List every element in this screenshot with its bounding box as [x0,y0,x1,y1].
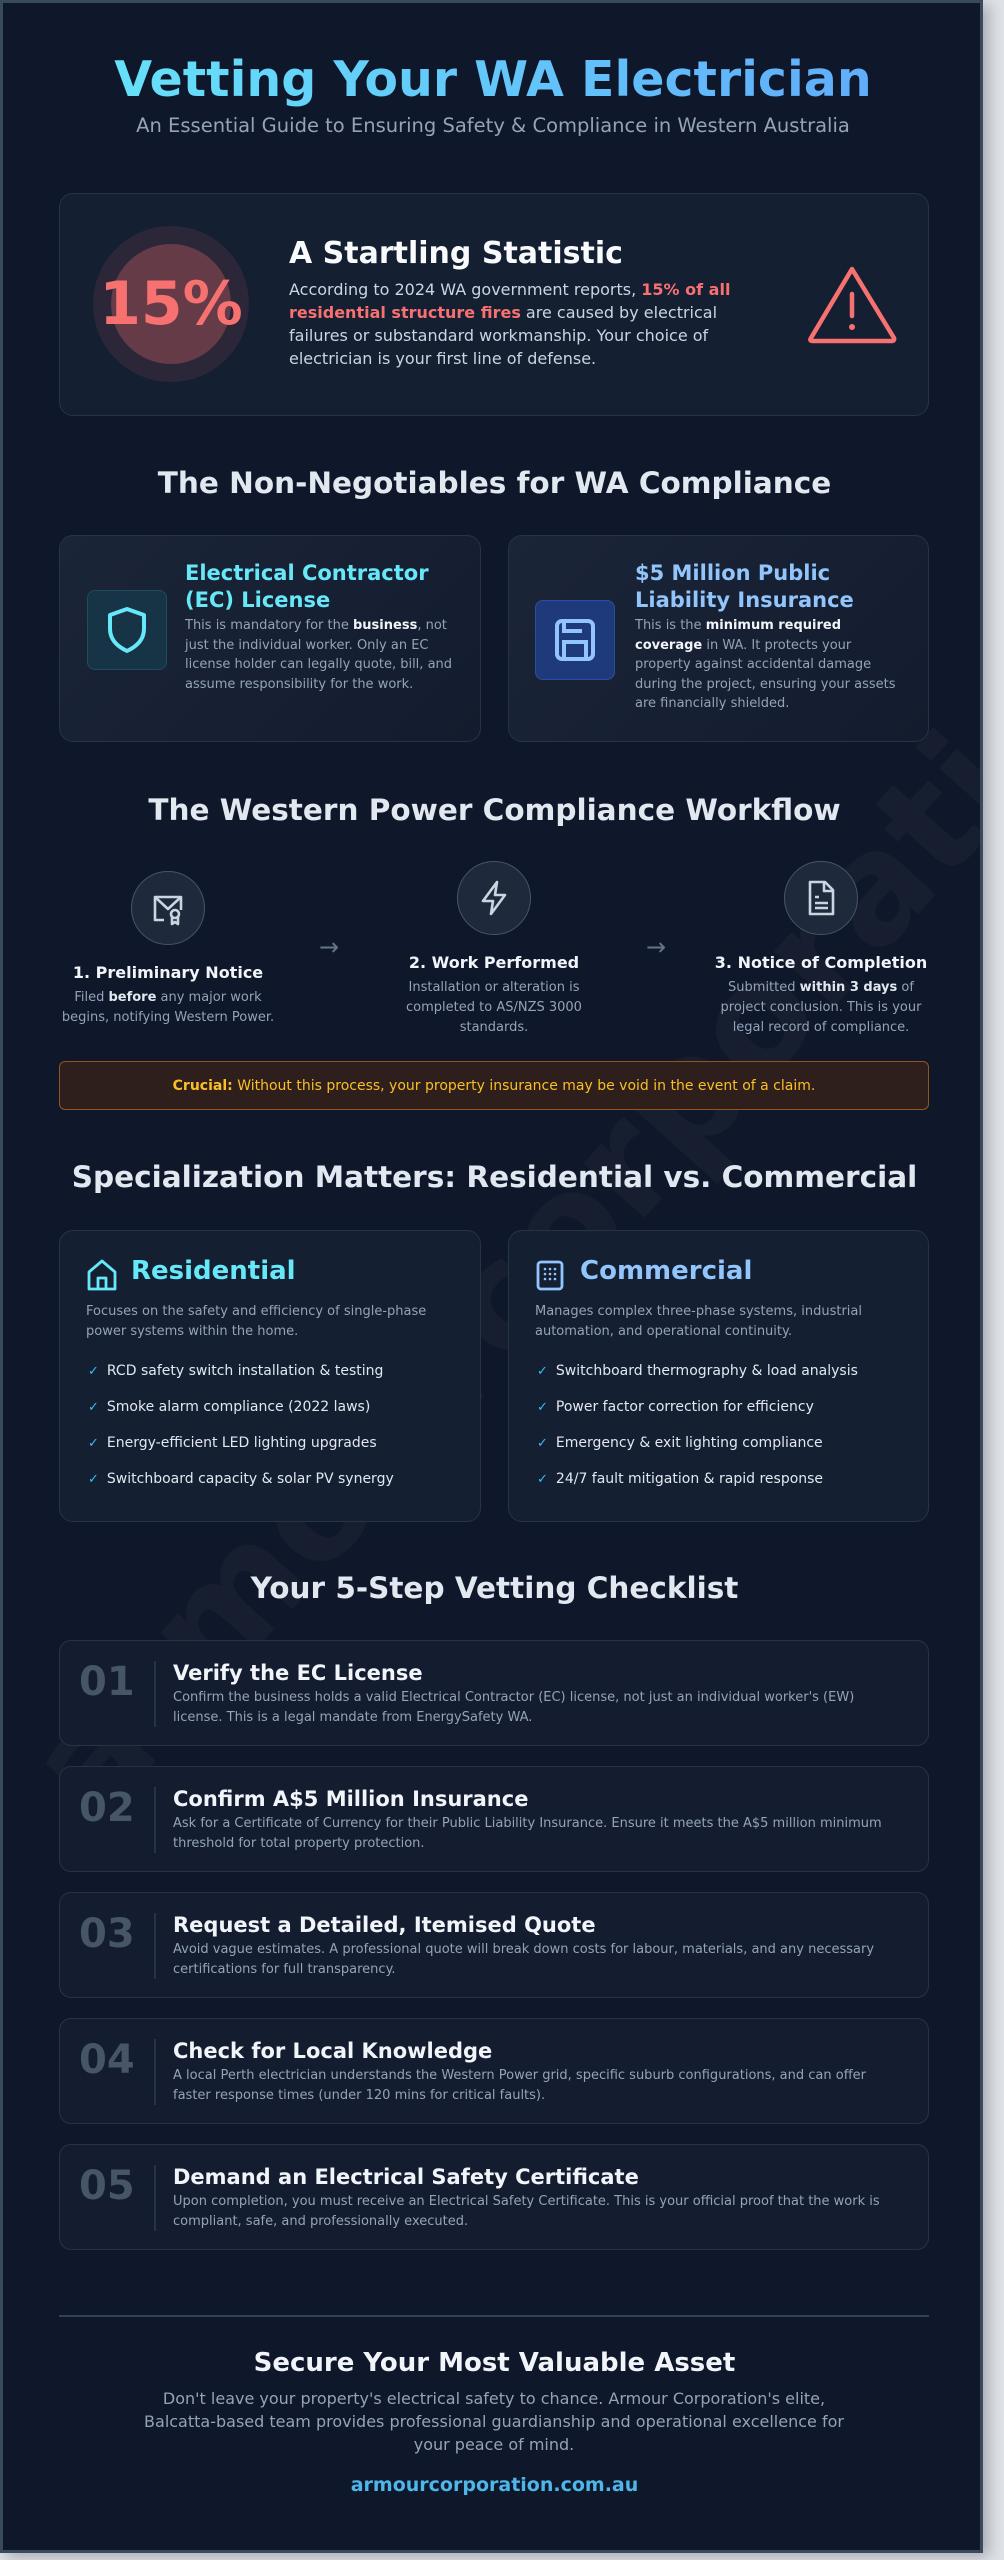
callout: crucial: Without this process, your property insurance may be void in the event of a claim. [237,1078,815,1094]
stat circle 15% [93,226,249,382]
arrow 1: → [319,933,339,961]
checklist item 5: Upon completion, you must receive an Electrical Safety Certificate. This is your official proof that the work is compliant, safe, and professionally executed. [173,2194,880,2229]
title: Vetting Your WA Electrician [114,51,872,108]
heading: non-negotiables: The Non-Negotiables for WA Compliance [158,466,831,500]
checklist item 1 [59,1640,929,1746]
list: ✓ Switchboard thermography & load analysis [537,1363,858,1379]
checklist item 5: Demand an Electrical Safety Certificate [173,2165,639,2189]
step 1 [62,871,274,1025]
checklist item 4 [59,2018,929,2124]
checklist item 2: Ask for a Certificate of Currency for their Public Liability Insurance. Ensure it meets the A$5 million minimum threshold for total property protection. [173,1816,882,1851]
text: This is mandatory for the business, not just the individual worker. Only an EC license holder can legally quote, bill, and assume responsibility for the work. [185,618,452,692]
checklist item 2: Confirm A$5 Million Insurance [173,1787,528,1811]
checklist item 2 [59,1766,929,1872]
icon: shield [87,590,167,670]
checklist item 4: Check for Local Knowledge [173,2039,492,2063]
subtitle: An Essential Guide to Ensuring Safety & Compliance in Western Australia [136,114,850,137]
checklist item 4: A local Perth electrician understands the Western Power grid, specific suburb configurations, and can offer faster response times (under 120 mins for critical faults). [173,2068,866,2103]
icon: building [536,1260,564,1290]
panel: commercial [508,1230,929,1522]
step 3: 3. Notice of Completion [715,953,927,972]
footer text: Don't leave your property's electrical safety to chance. Armour Corporation's elite, Balcatta-based team provides professional guardianship and operational excellence for your peace of mind. [144,2389,844,2454]
step 1: 1. Preliminary Notice [73,963,263,982]
checklist item 5: 05 [79,2163,135,2209]
callout: crucial [59,1061,929,1110]
callout: crucial: Crucial: [173,1078,233,1094]
panel: residential: ✓ Switchboard capacity & solar PV synergy [88,1471,394,1487]
panel: commercial: ✓ Power factor correction for efficiency [537,1399,814,1415]
panel: EC license [59,535,481,742]
checklist item 2: 02 [79,1785,135,1831]
footer link: armourcorporation.com.au [351,2474,638,2496]
stat text: According to 2024 WA government reports, 15% of all residential structure fires are caused by electrical failures or substandard workmanship. Your choice of electrician is your first line of defense. [289,280,730,368]
checklist item 3: 03 [79,1911,135,1957]
panel: public liability insurance [508,535,929,742]
heading: workflow: The Western Power Compliance Workflow [148,793,841,827]
step 3: Submitted within 3 days of project conclusion. This is your legal record of compliance. [721,980,921,1035]
panel: startling statistic [59,193,929,416]
heading: specialization: Specialization Matters: Residential vs. Commercial [72,1160,917,1194]
stat heading: A Startling Statistic [289,236,623,271]
panel: commercial: ✓ Emergency & exit lighting compliance [537,1435,823,1451]
icon: floppy [535,600,615,680]
list: ✓ RCD safety switch installation & testing [88,1363,383,1379]
title: Electrical Contractor (EC) License [185,561,429,612]
heading: checklist: Your 5-Step Vetting Checklist [251,1571,738,1605]
step 1: Filed before any major work begins, notifying Western Power. [62,990,274,1025]
checklist item 1: Verify the EC License [173,1661,423,1685]
title: Commercial [580,1256,752,1286]
footer heading: Secure Your Most Valuable Asset [254,2348,735,2378]
icon: warning triangle [808,266,896,344]
panel: residential [59,1230,481,1522]
step 2: Installation or alteration is completed to AS/NZS 3000 standards. [406,980,582,1035]
desc: Manages complex three-phase systems, industrial automation, and operational continuity. [535,1304,862,1339]
checklist item 3: Avoid vague estimates. A professional quote will break down costs for labour, materials, and any necessary certifications for full transparency. [173,1942,874,1977]
title: $5 Million Public Liability Insurance [635,561,854,612]
step 2 [406,861,582,1035]
text: This is the minimum required coverage in WA. It protects your property against accidental damage during the project, ensuring your assets are financially shielded. [635,618,896,711]
stat circle 15%: 15% [99,269,243,339]
checklist item 3: Request a Detailed, Itemised Quote [173,1913,596,1937]
panel: commercial: ✓ 24/7 fault mitigation & rapid response [537,1471,823,1487]
checklist item 1: Confirm the business holds a valid Electrical Contractor (EC) license, not just an individual worker's (EW) license. This is a legal mandate from EnergySafety WA. [173,1690,854,1725]
checklist item 5 [59,2144,929,2250]
panel: residential: ✓ Energy-efficient LED lighting upgrades [88,1435,377,1451]
title: Residential [131,1256,296,1286]
checklist item 3 [59,1892,929,1998]
panel: residential: ✓ Smoke alarm compliance (2022 laws) [88,1399,370,1415]
checklist item 1: 01 [79,1659,135,1705]
step 2: 2. Work Performed [409,953,579,972]
step 3 [715,861,927,1035]
desc: Focuses on the safety and efficiency of single-phase power systems within the home. [86,1304,426,1339]
arrow 2: → [646,933,666,961]
checklist item 4: 04 [79,2037,135,2083]
icon: house [88,1260,116,1290]
